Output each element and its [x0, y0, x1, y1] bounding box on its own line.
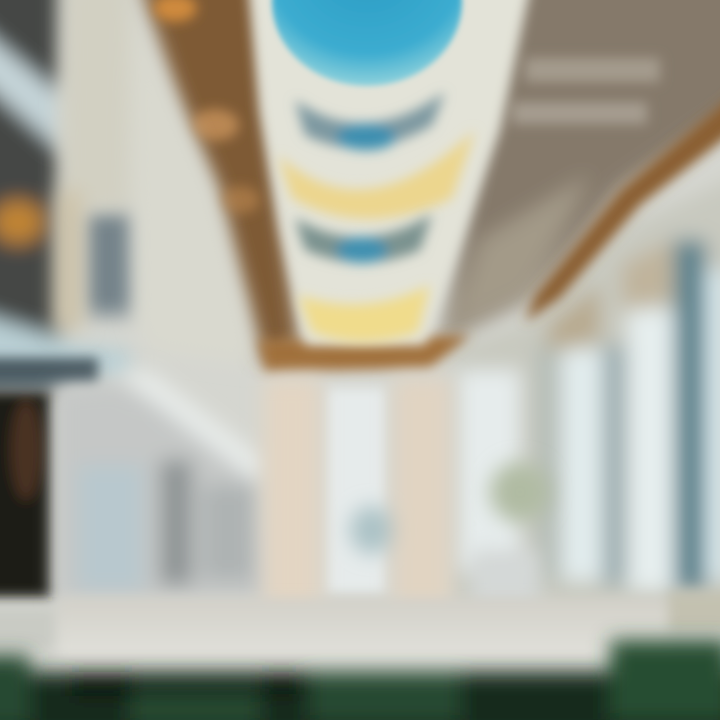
ceiling: right taupe panel: [440, 0, 720, 345]
right windows and columns: [450, 170, 720, 610]
lower-left glass wall: [55, 372, 270, 600]
skylight: blue and grey band upper: [295, 92, 445, 150]
skylight: blue and grey band lower: [295, 214, 432, 263]
wooden band under skylight: [255, 335, 470, 372]
ceiling: wooden beam on the right: [525, 80, 720, 322]
foreground: dark green planting: [0, 640, 720, 720]
ceiling lights: [153, 0, 260, 214]
lower-left dark doorway: [0, 358, 98, 597]
central columns and windows: [326, 388, 386, 593]
skylight: yellow bands: [278, 130, 475, 342]
ceiling: wooden panel left of centre: [135, 0, 300, 360]
ceiling: pale strips: [512, 58, 660, 124]
left columns: [55, 0, 255, 365]
skylight: blue circle: [272, 0, 462, 86]
left wall: [0, 0, 135, 390]
skylight: white elliptical rings: [248, 0, 532, 345]
floor: pale reflective band: [0, 592, 720, 662]
